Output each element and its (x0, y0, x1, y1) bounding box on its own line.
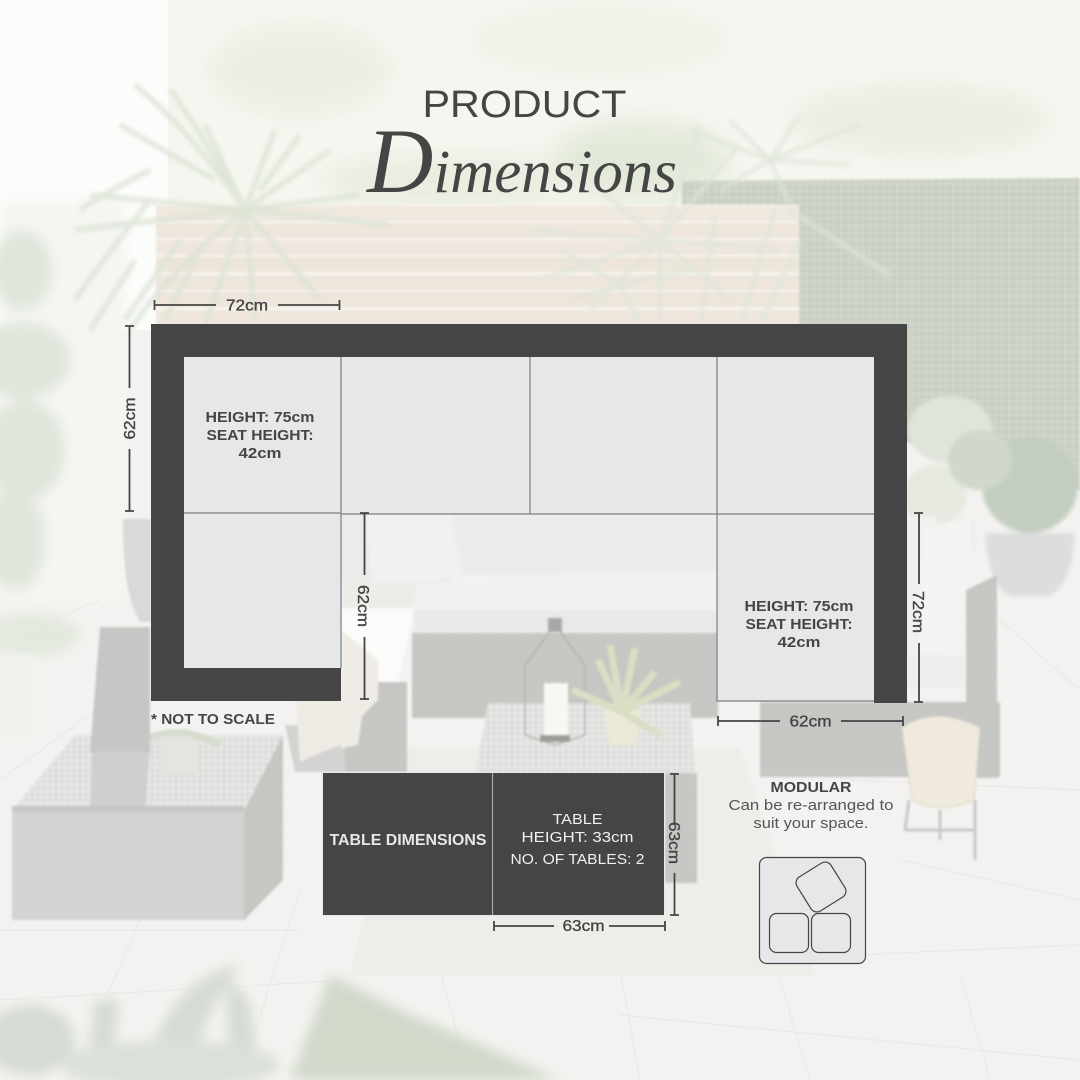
modular note: Can be re-arranged to (728, 798, 894, 814)
background: left bamboo plant (0, 230, 80, 657)
dimension: top 72cm: 72cm (226, 298, 268, 314)
table panel: details: TABLE (552, 812, 603, 828)
background: white planter (0, 655, 34, 740)
background: sofa (285, 514, 718, 772)
dimension: table depth 63cm: 63cm (665, 822, 682, 864)
label: lower right seat heights: HEIGHT: 75cm (744, 599, 854, 615)
modular note (728, 780, 894, 832)
title (365, 84, 677, 212)
sofa frame: dark L and U shape (151, 324, 907, 703)
table panel: details: HEIGHT: 33cm (522, 830, 634, 846)
seat module: top left (184, 357, 341, 513)
label: lower right seat heights: 42cm (778, 635, 820, 651)
background: white wall and column (0, 0, 168, 330)
dimension: left 62cm (122, 326, 139, 511)
label: upper left seat heights (206, 410, 314, 462)
table panel: heading: TABLE DIMENSIONS (330, 832, 486, 849)
seat module: top middle left (341, 357, 530, 514)
table panel: details (510, 812, 644, 868)
modular note: MODULAR (770, 780, 852, 796)
note: not to scale: * NOT TO SCALE (151, 712, 275, 728)
dimension: inner 62cm (354, 513, 371, 699)
background: right side plants (903, 396, 1078, 596)
dimension: bottom 62cm (718, 714, 903, 730)
background: rattan floor lamp (902, 716, 980, 860)
dimension: inner 62cm: 62cm (354, 585, 371, 627)
background: palm fronds left (75, 85, 390, 330)
table dimensions panel (322, 772, 664, 916)
background: palm fronds right (530, 115, 890, 325)
background: potted fern (572, 645, 680, 745)
background: centre wicker table (475, 618, 697, 883)
background: wooden slat fence (156, 205, 799, 325)
seat module: top right (717, 357, 874, 514)
background: foreground foliage (0, 965, 560, 1080)
seat module: top middle right (530, 357, 717, 514)
dimension: top 72cm (154, 298, 340, 314)
dimension: table width 63cm: 63cm (562, 918, 604, 935)
label: lower right seat heights: SEAT HEIGHT: (746, 617, 852, 633)
background: floor tile lines (0, 600, 1080, 1080)
background: candle lantern (525, 618, 585, 745)
label: upper left seat heights: HEIGHT: 75cm (206, 410, 314, 426)
seat module: lower left (184, 513, 341, 668)
dimension: table width 63cm (494, 918, 665, 935)
table panel: details: NO. OF TABLES: 2 (510, 852, 644, 868)
dimension: left 62cm: 62cm (122, 398, 139, 440)
background: patterned rug (350, 748, 815, 975)
dimension: right 72cm (909, 513, 926, 702)
seat module: lower right (717, 514, 874, 701)
modular note: suit your space. (754, 816, 868, 832)
background: left plant pot (123, 519, 151, 622)
label: upper left seat heights: 42cm (238, 446, 282, 462)
background: right sofa section (760, 516, 1000, 778)
dimension: table depth 63cm (665, 774, 682, 915)
sofa floor plan (151, 324, 907, 703)
title: product: PRODUCT (422, 84, 626, 126)
title: dimensions script: Dimensions (365, 110, 677, 212)
background: black lantern on table (90, 627, 150, 752)
icon: modular arrangement (760, 858, 866, 964)
dimension: right 72cm: 72cm (909, 591, 926, 633)
background: left wicker table (12, 732, 283, 920)
background: garden greenery (165, 0, 1080, 210)
label: lower right seat heights (744, 599, 854, 651)
label: upper left seat heights: SEAT HEIGHT: (206, 428, 314, 444)
background: hedge (682, 178, 1080, 490)
dimension: bottom 62cm: 62cm (790, 714, 832, 730)
